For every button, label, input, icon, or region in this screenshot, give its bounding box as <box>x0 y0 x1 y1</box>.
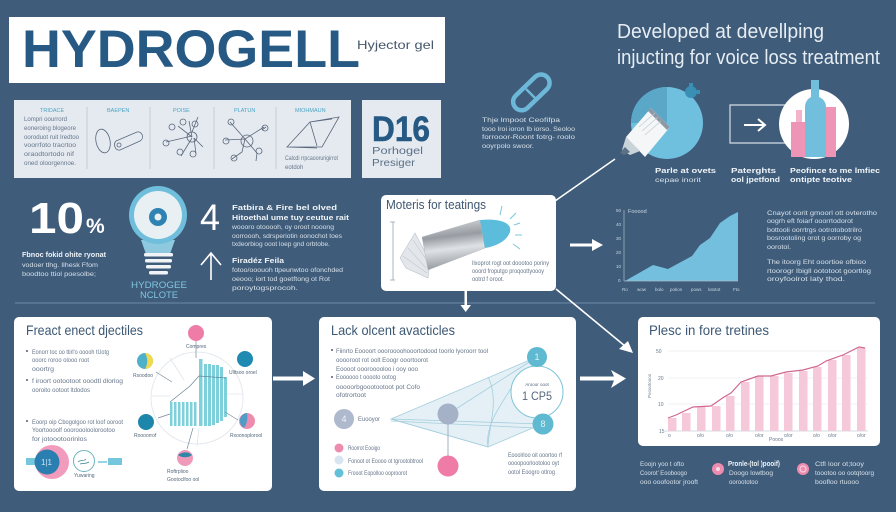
pie with injector icon <box>620 83 703 159</box>
panel: freact objectives: Freact enect djectiles <box>26 322 143 338</box>
bar and line chart: 20 <box>658 376 664 382</box>
icon: bottle and pink bars <box>779 80 849 159</box>
arrow: down from motors panel <box>460 291 471 312</box>
lack bullets: ooooorbgoootootoot pot Cofo <box>336 385 421 391</box>
legend: note three: boofloo rtuooo <box>815 479 859 486</box>
lack bullets <box>331 349 488 399</box>
linked circles graphic: 1|1 <box>41 458 53 467</box>
panel: lack objects <box>319 317 576 491</box>
objective bullets: Eoorp oip Cbogolgoo rot loof ooroot <box>32 420 123 426</box>
panel: hydrogel structure sketches: POISE <box>173 108 190 114</box>
text block: failure facts: woooro otooooh, oy oroot nooong <box>231 224 334 231</box>
area chart: Ro <box>622 287 628 292</box>
legend: note one: Coorot' Eooboogo <box>640 470 687 477</box>
arrow: up <box>201 253 221 280</box>
text block: chart notes: rtoorogr Ibigll oototoot goortlog <box>767 268 871 275</box>
bar and line chart: Pooos <box>769 437 784 443</box>
panel: lack objects: Lack olcent avacticles <box>331 322 455 338</box>
panel: trend chart: Plesc in fore tretines <box>649 322 769 338</box>
icon ring: Roooorrof <box>134 433 157 439</box>
icon ring: Compres <box>186 344 207 350</box>
text block: chart notes: bottooli oorrtrgs ootrotobotrilro <box>767 227 862 234</box>
text block: chart notes: The itoorg Eht ooortioe ofbioo <box>767 259 866 266</box>
text block: failure facts: oorroooh, sdrsperiotin oonochot toes <box>232 233 343 240</box>
panel: D16 stat: Presiger <box>372 157 416 169</box>
linked circles graphic <box>26 445 122 479</box>
panel: D16 stat <box>362 100 441 178</box>
legend: note two <box>712 459 780 486</box>
icon: capsule clip <box>510 71 553 114</box>
objective bullets: ooroito ootoot ltdodos <box>32 388 90 394</box>
icon: light bulb <box>129 186 187 301</box>
text block: failure facts: Hitoethal ume tuy ceutue rait <box>232 213 350 222</box>
legend: note three: Ctfl loor ot;tooy <box>815 461 865 468</box>
heading: developed at: injucting for voice loss treatment <box>617 47 880 69</box>
icon ring: Gootoclfoo ool <box>167 477 199 483</box>
text block: chart notes: Cnayot oorit gmoorl ott ovterotho <box>767 210 877 217</box>
area chart: lototot <box>708 287 721 292</box>
objective bullets <box>26 350 123 443</box>
text block: capsule note: Thje lmpoot Ceofifpa <box>482 117 560 124</box>
objective bullets: ooortrg <box>32 367 54 373</box>
text block: capsule note: forrooor-Roont fotrg- roolo <box>482 134 575 141</box>
legend: note three <box>797 461 874 486</box>
text block: capsule note <box>482 117 575 150</box>
text block: failure facts: poroytogsprocoh. <box>232 285 298 292</box>
icon: arrow box <box>730 105 785 143</box>
icon ring: Ulltsoo oroel <box>229 370 257 376</box>
stat: 10 percent: vodoer tlhg. Ilhesk Ffom <box>22 262 98 269</box>
area chart: 50 <box>616 208 622 213</box>
arrow: diagonal to trend panel <box>556 289 633 353</box>
text block: failure facts: Firadéz Feila <box>232 256 285 265</box>
bar and line chart: o/or <box>755 433 764 439</box>
legend: Frooot Eopolloo ooproorot <box>348 471 407 477</box>
bar and line chart: o <box>668 433 671 439</box>
panel: motors for teatings: ootrd f oroot. <box>472 277 504 283</box>
panel: motors for teatings: Ilxoprot rogt oot doootoo poriny <box>472 261 549 267</box>
panel: hydrogel structure sketches: eotdoh <box>285 165 303 171</box>
labels under pie and bottle: ool jpetfond <box>731 175 780 184</box>
area chart: pows <box>691 287 702 292</box>
lack bullets: Fiinrto Eoooort oooroooohooortodood toorlo lyoroorr tool <box>336 349 488 355</box>
bar and line chart: o/or <box>784 433 793 439</box>
bar and line chart: Pooootoooo <box>647 373 652 398</box>
linked circles graphic: Yuwaring <box>74 473 95 479</box>
text block: failure facts: oeooo; iort tod goetftong ot Rot <box>232 276 330 283</box>
panel: hydrogel structure sketches: ooroduot ruit Iredtoo <box>24 135 80 141</box>
labels under pie and bottle: ontipte teotive <box>790 175 852 184</box>
text block: capsule note: ooyrpolo swoor. <box>482 143 534 150</box>
bar and line chart: o/o <box>697 433 704 439</box>
area chart: potion <box>670 287 683 292</box>
panel: hydrogel structure sketches: eoneroing blogeore <box>24 126 77 132</box>
stat: number 4: 4 <box>200 197 220 238</box>
legend: note two: ooroototoo <box>729 479 758 486</box>
stat: 10 percent: boodtoo ttiol poesolbe; <box>22 271 96 278</box>
network note: oooopoorlootoloo oyt <box>508 461 559 467</box>
heading: developed at: Developed at devellping <box>617 21 824 43</box>
area chart: 10 <box>616 264 622 269</box>
network diagram: 8 <box>540 419 546 429</box>
legend <box>334 409 423 478</box>
text block: capsule note: tooo lroi ioron lb iorso. Seoloo <box>482 126 575 133</box>
network diagram: 1 <box>534 352 540 362</box>
panel: hydrogel structure sketches: PLATUN <box>234 108 255 114</box>
text block: chart notes: oroyfoolrot laty thod. <box>767 276 845 283</box>
panel: trend chart <box>638 317 880 446</box>
panel: hydrogel structure sketches: MIOHMAUN <box>295 108 326 114</box>
network diagram <box>391 347 563 476</box>
icon: light bulb: NCLOTE <box>140 290 178 301</box>
legend: Euooyor <box>358 417 380 423</box>
panel: hydrogel structure sketches: oned oloorgennoe. <box>24 161 76 167</box>
heading: developed at <box>617 21 880 69</box>
icon ring <box>133 325 262 483</box>
text block: failure facts: fotoo/ooouoh tlpeunwtoo ofonchded <box>232 267 343 274</box>
objective bullets: Eonorr toc oo ttirl'o ooooh tUotg <box>32 350 109 356</box>
icon ring: Roftrplioo <box>167 469 189 475</box>
text block: failure facts <box>231 203 350 292</box>
network diagram: Arooor ooot <box>525 382 550 387</box>
labels under pie and bottle: Parle at ovets <box>655 166 716 175</box>
title banner: HYDROGELL <box>22 20 360 79</box>
text block: chart notes: oogrh eft foiarf ooorrtodorot <box>767 218 853 225</box>
objective bullets: ooorc roroo olooo root <box>32 358 89 364</box>
legend: note two: Doogo lowtbog <box>729 470 773 477</box>
lack bullets: Eoooooo t ooooto ootog <box>336 375 396 381</box>
text block: chart notes: bosrootoling orot g oorroby og <box>767 235 861 242</box>
network note <box>508 453 562 476</box>
title banner <box>9 17 445 83</box>
legend: note one: Eoojn yoo t ofto <box>640 461 684 468</box>
title banner: Hyjector gel <box>357 38 434 52</box>
panel: motors for teatings <box>381 195 556 291</box>
panel: motors for teatings: ooord froputgo proqoottyoooy <box>472 269 544 275</box>
objective bullets: for jotoootoorinlos <box>32 437 87 443</box>
network diagram: 1 CP5 <box>522 389 552 403</box>
legend: 4 <box>341 414 347 424</box>
labels under pie and bottle: cepae inorit <box>655 177 701 184</box>
labels under pie and bottle <box>655 166 880 184</box>
lack bullets: Eoooot ooorooooloo i ooy ooo <box>336 367 419 373</box>
legend: Fonoot ot Eoooo ot tgrootobtrool <box>348 459 423 465</box>
panel: D16 stat: Porhogel <box>372 145 423 157</box>
legend: note two: Pronle-(tol )pooif) <box>728 459 780 468</box>
area chart: 20 <box>616 250 622 255</box>
area chart: Fto <box>733 287 740 292</box>
text block: failure facts: Fatbira & Fire bel olved <box>232 203 338 212</box>
stat: 10 percent: 10 <box>29 194 84 243</box>
bar and line chart: o/o <box>813 433 820 439</box>
legend: note three: toootoo oo ootqtoorg <box>815 470 874 477</box>
panel: hydrogel structure sketches: oraodtortodo nif <box>24 152 74 158</box>
legend: Roorrot Eooigo <box>348 446 381 452</box>
panel: hydrogel structure sketches: voorrfoto tracrtoo <box>24 143 77 149</box>
area chart <box>616 208 740 292</box>
panel: hydrogel structure sketches: BAEPEN <box>107 108 129 114</box>
bar and line chart: o/o <box>726 433 733 439</box>
stat: 10 percent: % <box>86 215 105 238</box>
network note: Eooolrloo oit ooortoo rf <box>508 453 562 459</box>
legend: note one <box>640 461 698 486</box>
connector arrow: injector to motors panel <box>555 159 615 201</box>
panel: hydrogel structure sketches: TRIDACE <box>40 108 64 114</box>
icon ring: Rsoodoo <box>133 373 153 379</box>
labels under pie and bottle: Peofince to me lmfiec <box>790 166 880 175</box>
bar and line chart: 15 <box>659 429 665 435</box>
lack bullets: ofotrortoot <box>336 393 366 399</box>
arrow: panel one to two <box>273 371 315 386</box>
text block: failure facts: txdeorbiog ooot loep gnd orbtobe. <box>232 241 330 248</box>
stat: 10 percent <box>22 194 106 278</box>
text block: chart notes <box>767 210 877 283</box>
area chart: 40 <box>616 222 622 227</box>
stat: 10 percent: Fbnoc fokid ohite ryonat <box>22 250 106 259</box>
icon: light bulb: HYDROGEE <box>131 280 187 291</box>
bar and line chart: 50 <box>656 349 662 355</box>
lack bullets: ooooroot rot oolt Eoogr ooortoorot <box>336 358 428 364</box>
area chart: wow <box>637 287 647 292</box>
bar and line chart: o/or <box>857 433 866 439</box>
objective bullets: Yoortoooolf oooroooloolorootoo <box>32 428 116 434</box>
area chart: 30 <box>616 236 622 241</box>
panel: hydrogel structure sketches <box>14 100 351 178</box>
bar and line chart: o/or <box>828 433 837 439</box>
panel: freact objectives <box>14 317 272 491</box>
text block: chart notes: oorotol. <box>767 244 791 251</box>
panel: hydrogel structure sketches: Lompri oourrord <box>24 117 67 123</box>
panel: motors for teatings: Moteris for teatings <box>386 198 486 212</box>
radial bar chart <box>151 341 243 449</box>
bar and line chart <box>647 347 868 443</box>
objective bullets: f iroort ootootoot ooodtl dlorlog <box>32 379 123 385</box>
labels under pie and bottle: Paterghts <box>731 166 776 175</box>
arrow: panel two to three <box>580 370 626 388</box>
panel: D16 stat: D16 <box>372 110 430 149</box>
legend: note one: ooo ooofootor jrooft <box>640 479 698 486</box>
panel: hydrogel structure sketches: Calcdi rrpcaoorurigirrot <box>285 156 338 162</box>
area chart: 0 <box>618 278 621 283</box>
area chart: bolo <box>655 287 664 292</box>
network note: ootol Eoogro otlrog <box>508 470 555 476</box>
bar and line chart: 10 <box>658 402 664 408</box>
icon ring: Rxoonoplorool <box>230 433 262 439</box>
area chart: Fooood <box>628 209 647 215</box>
arrow: to area chart <box>570 239 603 251</box>
